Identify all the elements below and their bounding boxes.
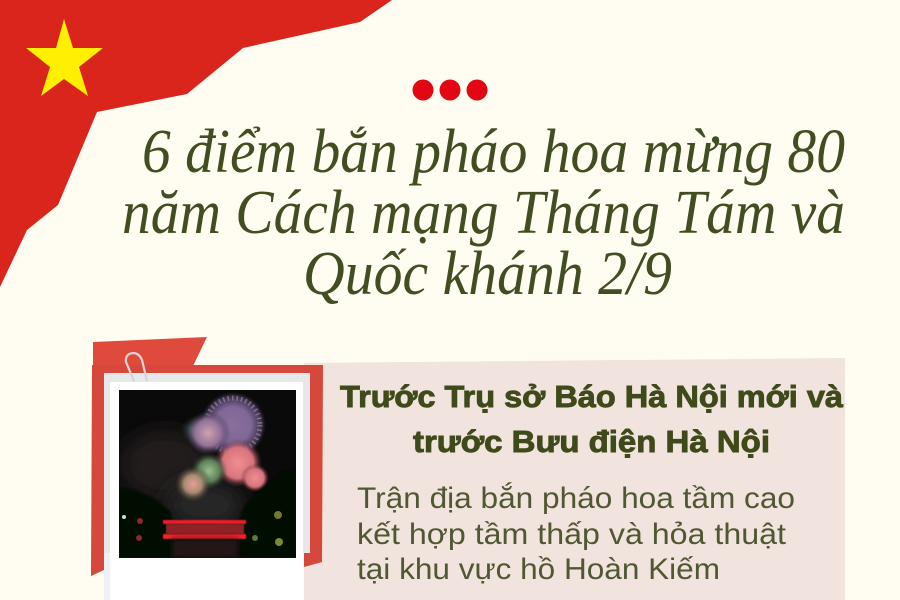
red frame [91, 365, 323, 576]
three red dots [412, 80, 488, 100]
icon: paper clip [126, 353, 147, 381]
location description: tại khu vực hồ Hoàn Kiếm [357, 553, 720, 586]
location heading: trước Bưu điện Hà Nội [413, 424, 770, 459]
title: Quốc khánh 2/9 [303, 240, 672, 308]
location description: kết hợp tầm thấp và hỏa thuật [357, 518, 786, 551]
photo: fireworks over The Huc bridge [119, 390, 296, 558]
note paper [104, 373, 310, 553]
bridge [163, 520, 246, 524]
location description [357, 482, 795, 586]
panel: location card background [304, 358, 845, 600]
icon: yellow star [26, 19, 103, 96]
photo frame group [91, 337, 323, 600]
lights [122, 515, 126, 519]
location heading [340, 379, 844, 459]
location heading: Trước Trụ sở Báo Hà Nội mới và [340, 379, 844, 414]
title [122, 118, 845, 308]
note paper left strip [104, 553, 110, 600]
trees [119, 488, 172, 557]
location description: Trận địa bắn pháo hoa tầm cao [357, 482, 795, 515]
polaroid [110, 382, 303, 600]
red tape [93, 337, 207, 368]
title: 6 điểm bắn pháo hoa mừng 80 [142, 118, 845, 186]
red flag corner shape with star [0, 0, 392, 287]
title: năm Cách mạng Tháng Tám và [122, 179, 845, 247]
